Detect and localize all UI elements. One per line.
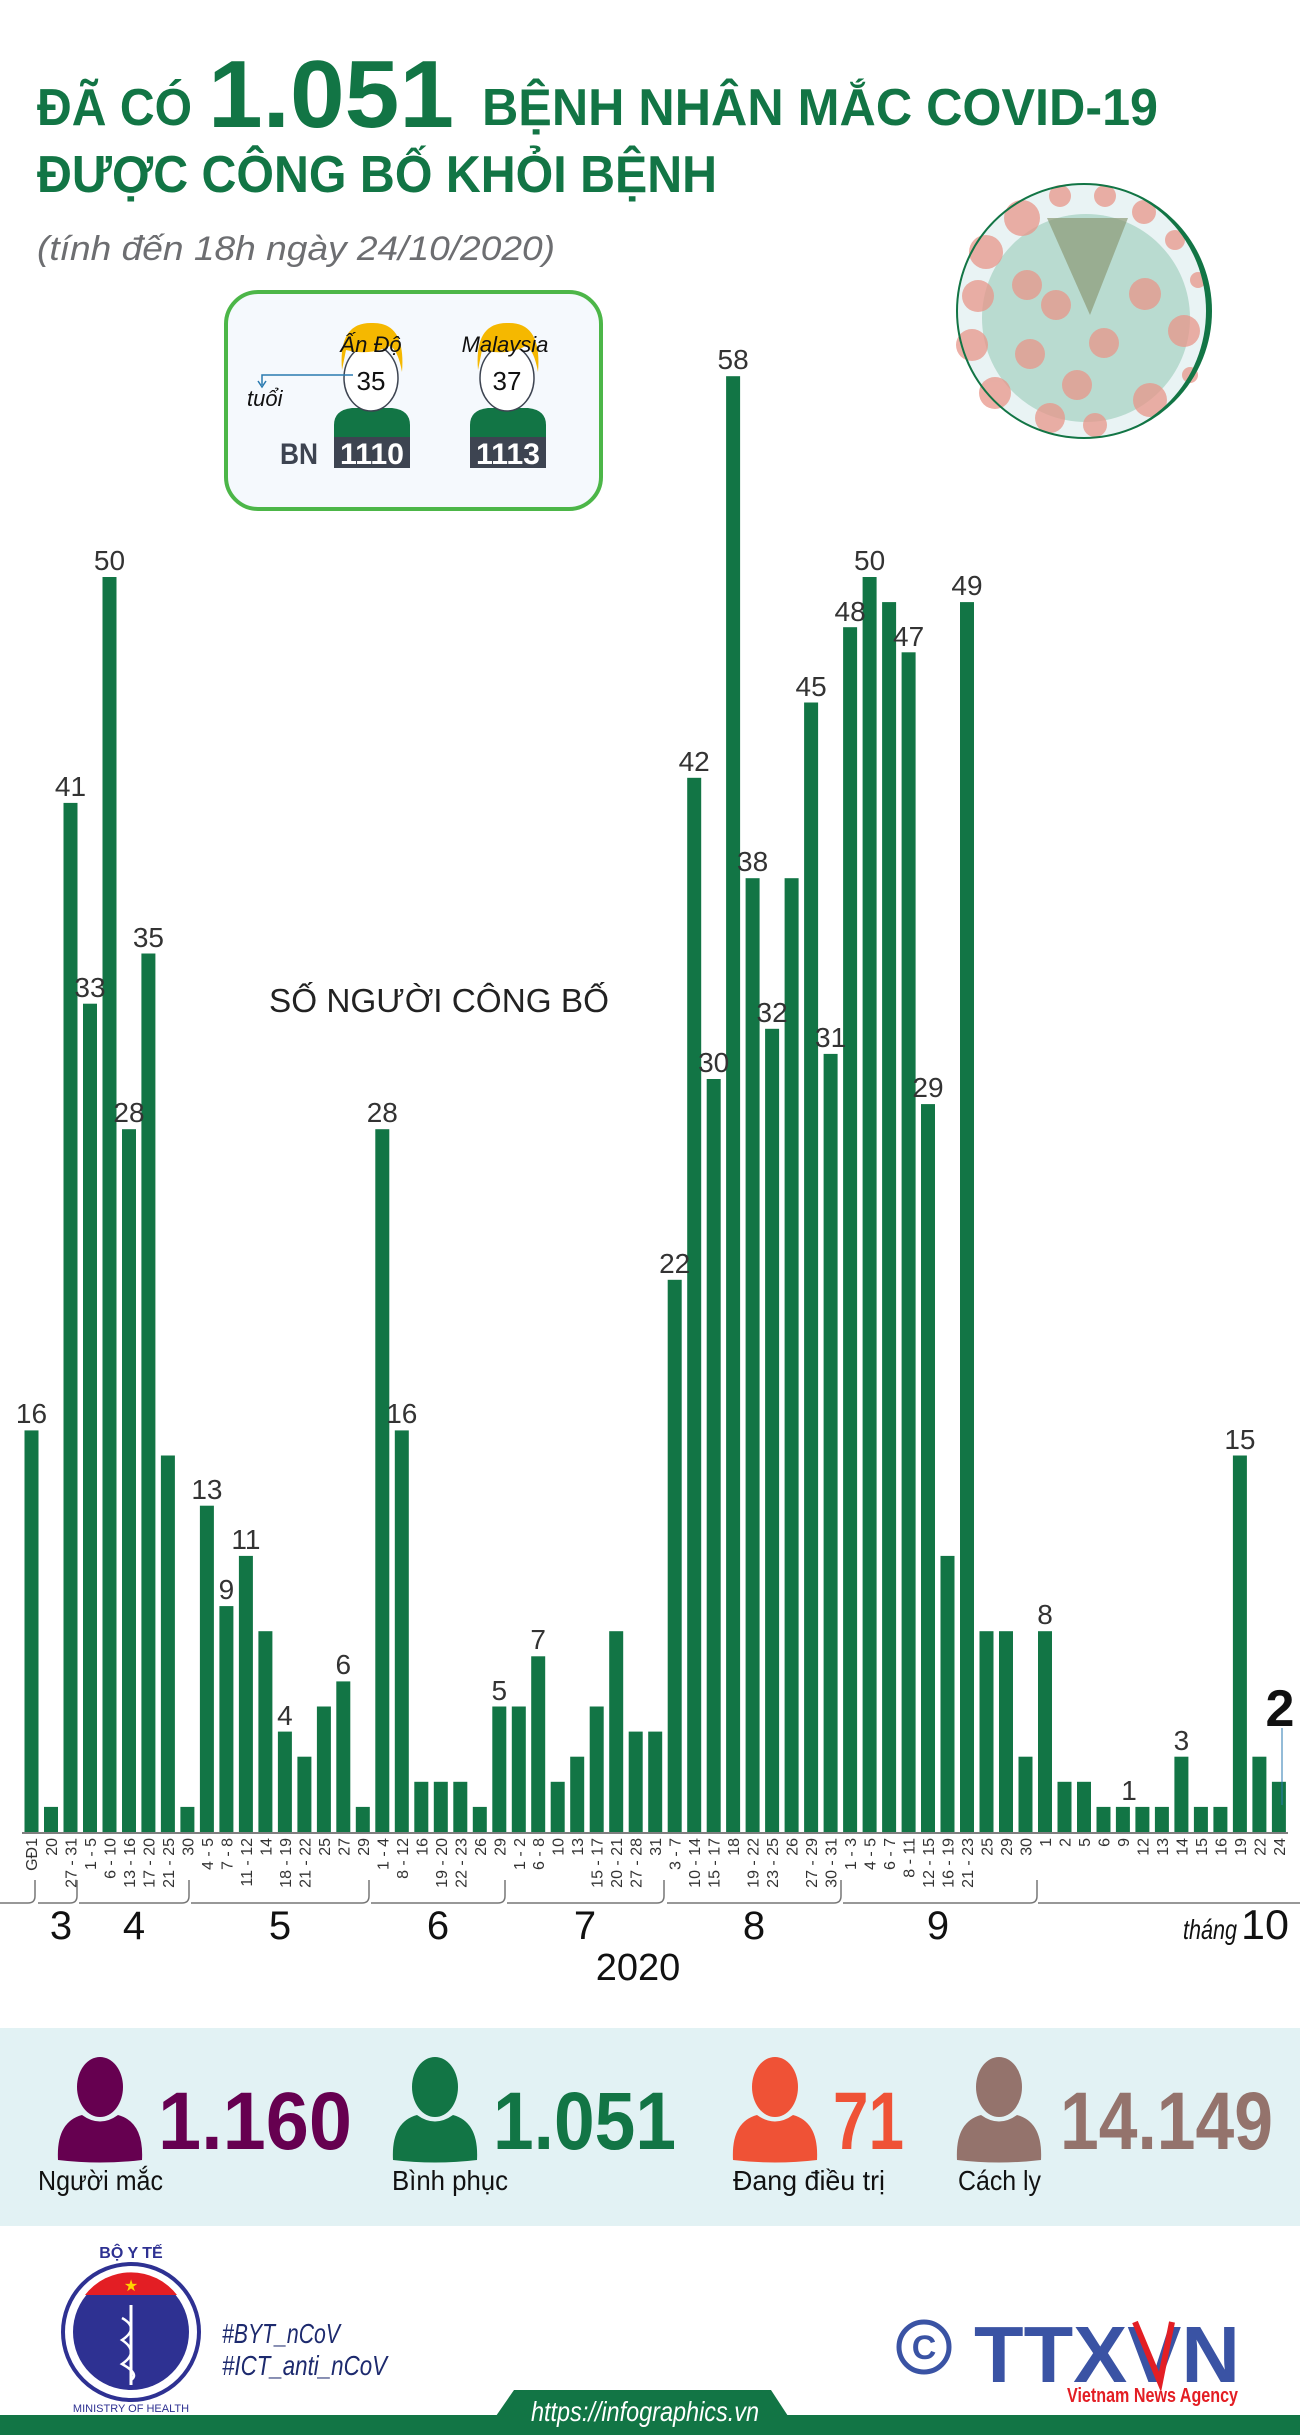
stat: đang điều trị [733,2057,904,2196]
x-axis date labels: 24 [1272,1838,1289,1856]
value labels: 31 [815,1022,846,1053]
value labels: 49 [951,570,983,601]
hashtags: #BYT_nCoV [222,2318,342,2349]
x-axis date labels: 27 - 29 [804,1838,821,1888]
x-axis date labels: 14 [258,1838,275,1856]
month labels: 8 [743,1904,765,1948]
value labels: 4 [277,1700,293,1731]
title: ĐƯỢC CÔNG BỐ KHỎI BỆNH [37,145,717,204]
patient 1110: 35 [357,366,385,396]
patient 1113: Malaysia [462,332,548,357]
value labels: 50 [94,545,125,576]
hashtags [222,2318,389,2381]
footer bar [0,2390,1300,2435]
x-axis date labels: 15 [1194,1838,1211,1856]
x-axis date labels: 15 - 17 [707,1838,724,1888]
x-axis date labels: 10 - 14 [687,1838,704,1888]
value labels: 38 [737,846,768,877]
x-axis date labels: 19 [1233,1838,1250,1856]
value labels: 50 [854,545,885,576]
callout: latest value 2: 2 [1266,1680,1294,1738]
callout: tuổi [247,375,353,411]
value labels: 48 [835,596,866,627]
x-axis date labels: 16 [414,1838,431,1856]
patient 1110: Ấn Độ [338,332,402,357]
month labels: 5 [269,1904,291,1948]
value labels [16,344,1255,1806]
logo: ministry of health [63,2243,199,2415]
x-axis date labels: 19 - 22 [746,1838,763,1888]
x-axis date labels: 23 - 25 [765,1838,782,1888]
value labels: 35 [133,922,164,953]
value labels: 58 [718,344,749,375]
x-axis date labels: 30 [180,1838,197,1856]
x-axis date labels: 26 [473,1838,490,1856]
patient 1110 [334,323,410,471]
month labels: 3 [50,1904,72,1948]
stat: bình phục: 1.051 [493,2076,676,2167]
value labels: 7 [530,1624,546,1655]
x-axis date labels: GĐ1 [24,1838,41,1871]
value labels: 32 [757,997,788,1028]
value labels: 3 [1174,1725,1189,1756]
stat: người mắc: 1.160 [158,2076,352,2167]
x-axis date labels: 16 [1213,1838,1230,1856]
x-axis date labels: 29 [492,1838,509,1856]
x-axis date labels: 30 - 31 [824,1838,841,1888]
x-axis date labels: 26 [785,1838,802,1856]
title: BỆNH NHÂN MẮC COVID-19 [482,78,1158,137]
footer bar: https://infographics.vn [531,2396,759,2427]
x-axis date labels: 18 - 19 [278,1838,295,1888]
month labels: 9 [927,1904,949,1948]
month labels: 7 [574,1904,596,1948]
month labels: 4 [123,1904,145,1948]
value labels: 45 [796,671,827,702]
logo: ministry of health: MINISTRY OF HEALTH [73,2403,189,2415]
x-axis date labels: 1 - 3 [843,1838,860,1870]
value labels: 28 [367,1097,398,1128]
logo: ministry of health: ★ [124,2278,138,2295]
month labels [50,1904,949,1948]
logo: TTXVN: Vietnam News Agency [1067,2385,1239,2407]
value labels: 47 [893,621,924,652]
x-axis date labels: 12 [1135,1838,1152,1856]
x-axis date labels: 25 [980,1838,996,1856]
value labels: 13 [191,1474,222,1505]
x-axis date labels: 13 [1155,1838,1172,1856]
x-axis date labels: 4 - 5 [863,1838,880,1870]
x-axis date labels: 1 - 4 [375,1838,392,1870]
stat: cách ly: Cách ly [958,2165,1041,2196]
x-axis date labels: 6 - 7 [882,1838,899,1870]
x-axis date labels: 19 - 20 [434,1838,451,1888]
logo: ministry of health: BỘ Y TẾ [99,2243,163,2262]
x-axis date labels: 5 [1077,1838,1094,1847]
icon: virus [956,184,1211,438]
x-axis date labels: 11 - 12 [239,1838,256,1887]
x-axis date labels: 22 - 23 [453,1838,470,1888]
value labels: 22 [659,1248,690,1279]
value labels: 42 [679,746,710,777]
value labels: 33 [74,972,106,1003]
value labels: 5 [492,1675,507,1706]
value labels: 15 [1224,1424,1255,1455]
x-axis date labels: 18 [726,1838,743,1856]
x-axis date labels: 27 - 31 [64,1838,80,1888]
label: BN: BN [280,438,318,471]
x-axis date labels: 10 [551,1838,568,1856]
subtitle: (tính đến 18h ngày 24/10/2020) [37,230,555,268]
value labels: 6 [336,1649,351,1680]
x-axis date labels: 13 [570,1838,587,1856]
x-axis date labels: 9 [1116,1838,1133,1847]
stat: đang điều trị: Đang điều trị [733,2165,885,2196]
patient 1113: 37 [493,366,521,396]
x-axis date labels: 8 - 11 [902,1838,919,1878]
x-axis date labels: 6 [1096,1838,1114,1847]
value labels: 1 [1121,1775,1137,1806]
x-axis date labels: 14 [1174,1838,1191,1856]
stat: người mắc: Người mắc [38,2165,163,2196]
patient 1113 [462,323,548,471]
month label: tháng 10 [1183,1901,1289,1948]
x-axis date labels: 12 - 15 [921,1838,938,1888]
x-axis date labels: 7 - 8 [219,1838,236,1870]
x-axis date labels: 3 - 7 [668,1838,685,1870]
value labels: 11 [231,1524,260,1555]
x-axis date labels: 21 - 23 [960,1838,977,1888]
x-axis date labels: 31 [648,1838,665,1856]
value labels: 41 [55,771,86,802]
value labels: 16 [16,1398,47,1429]
hashtags: #ICT_anti_nCoV [222,2350,389,2381]
patient 1113: 1113 [476,438,540,471]
x-axis date labels: 29 [999,1838,1016,1856]
logo: TTXVN: TTXVN [974,2310,1240,2399]
stat: bình phục [392,2057,676,2196]
x-axis date labels: 20 [44,1838,61,1856]
x-axis date labels: 27 - 28 [629,1838,646,1888]
callout: latest value 2 [1266,1680,1294,1805]
panel: patients [226,292,601,509]
x-axis date labels: 22 [1252,1838,1269,1856]
x-axis date labels: 1 - 5 [83,1838,100,1870]
x-axis date labels: 6 - 8 [531,1838,548,1870]
title [37,41,1158,204]
chart label: SỐ NGƯỜI CÔNG BỐ [269,981,609,1019]
month label: tháng 10: 10 [1241,1901,1289,1948]
x-axis date labels: 1 - 2 [512,1838,529,1870]
x-axis date labels: 15 - 17 [590,1838,607,1888]
value labels: 29 [912,1072,944,1103]
x-axis date labels: 13 - 16 [122,1838,139,1888]
bar chart [16,344,1294,1833]
x-axis date labels: 6 - 10 [102,1838,120,1879]
value labels: 30 [698,1047,729,1078]
callout: tuổi: tuổi [247,386,284,411]
x-axis date labels: 4 - 5 [200,1838,217,1870]
x-axis date labels: 27 [336,1838,353,1856]
patient 1110: 1110 [340,438,404,471]
x-axis date labels: 25 [317,1838,334,1856]
title: 1.051 [208,41,454,148]
x-axis date labels [24,1838,1289,1888]
stat: bình phục: Bình phục [392,2165,508,2196]
panel: stats [0,2028,1300,2226]
x-axis date labels: 17 - 20 [141,1838,158,1888]
year label: 2020 [596,1947,680,1989]
x-axis date labels: 21 - 25 [161,1838,178,1888]
x-axis date labels: 21 - 22 [297,1838,314,1888]
x-axis date labels: 1 [1038,1838,1055,1847]
value labels: 28 [113,1097,145,1128]
month label: tháng 10: tháng [1183,1914,1237,1945]
x-axis date labels: 29 [356,1838,373,1856]
x-axis date labels: 16 - 19 [940,1838,958,1888]
value labels: 16 [386,1398,417,1429]
month brackets [0,1880,1300,1903]
logo: TTXVN: C [912,2329,936,2367]
title: ĐÃ CÓ [37,78,192,137]
x-axis date labels: 30 [1018,1838,1036,1856]
x-axis date labels: 20 - 21 [609,1838,626,1888]
value labels: 9 [219,1574,234,1605]
month labels: 6 [427,1904,449,1948]
stat: đang điều trị: 71 [833,2076,904,2167]
stat: cách ly [957,2057,1273,2196]
x-axis date labels: 8 - 12 [395,1838,412,1879]
value labels: 8 [1037,1599,1053,1630]
x-axis date labels: 2 [1058,1838,1074,1847]
stat: người mắc [38,2057,352,2196]
